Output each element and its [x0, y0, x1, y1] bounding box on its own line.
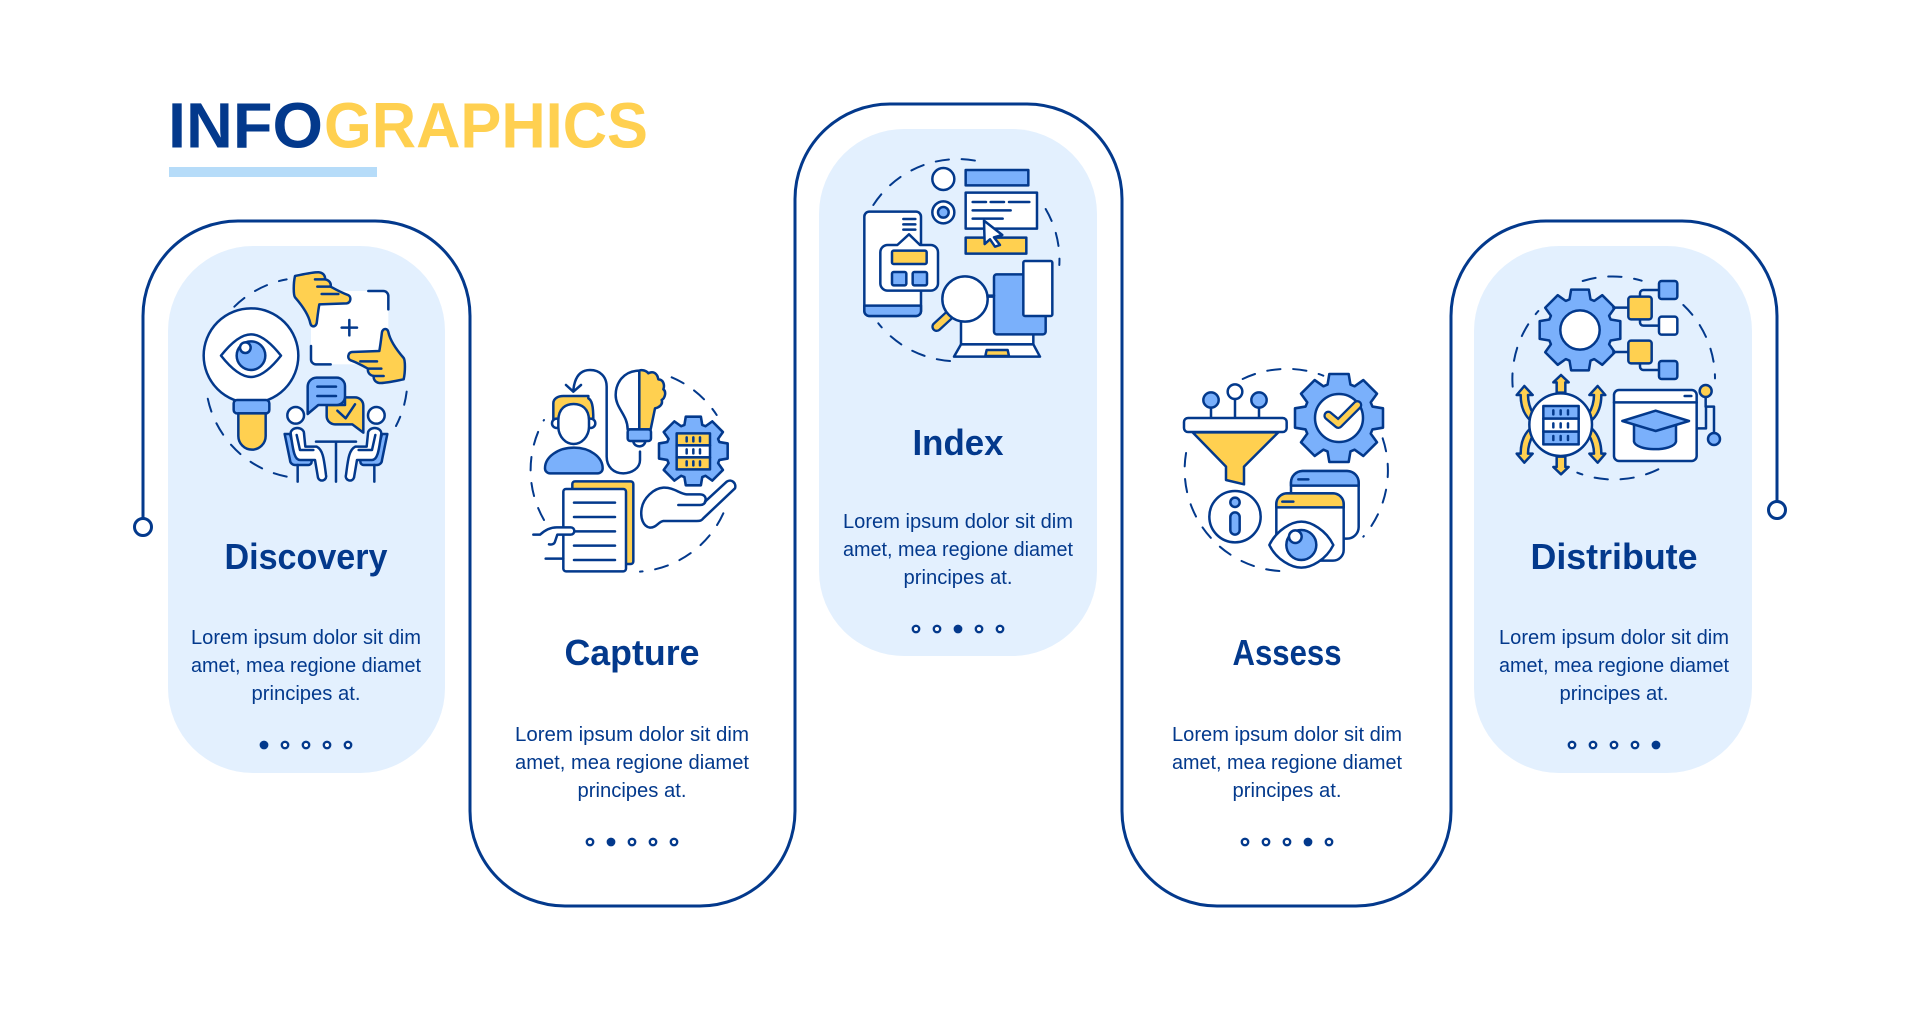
- pagination dots: Discovery: [261, 742, 351, 748]
- icon: index: [864, 159, 1059, 361]
- body text: Discovery: principes at.: [252, 683, 360, 705]
- body text: Index: [843, 511, 1073, 589]
- card: Index: [843, 159, 1073, 632]
- body text: Discovery: [191, 627, 421, 705]
- card: Discovery: [191, 272, 421, 748]
- body text: Discovery: Lorem ipsum dolor sit dim: [191, 627, 421, 649]
- body text: Assess: amet, mea regione diamet: [1172, 752, 1402, 774]
- icon: discovery: [204, 272, 407, 482]
- body text: Capture: amet, mea regione diamet: [515, 752, 749, 774]
- body text: Assess: principes at.: [1232, 780, 1342, 802]
- icon: assess: [1184, 369, 1388, 571]
- heading: Capture: Capture: [564, 632, 700, 673]
- body text: Assess: Lorem ipsum dolor sit dim: [1172, 724, 1402, 746]
- body text: Capture: [515, 724, 749, 802]
- body text: Capture: principes at.: [578, 780, 686, 802]
- heading: Index: Index: [912, 422, 1004, 463]
- title: INFO: [168, 90, 323, 162]
- icon: capture: [531, 370, 735, 572]
- heading: Assess: Assess: [1232, 632, 1342, 673]
- heading: Discovery: Discovery: [224, 536, 388, 577]
- body text: Index: principes at.: [904, 567, 1012, 589]
- pagination dots: Assess: [1242, 839, 1332, 845]
- body text: Distribute: amet, mea regione diamet: [1499, 655, 1729, 677]
- title: [168, 90, 648, 162]
- card: Assess: [1172, 369, 1402, 845]
- icon: distribute: [1512, 276, 1720, 480]
- body text: Capture: Lorem ipsum dolor sit dim: [515, 724, 749, 746]
- card: Distribute: [1499, 276, 1729, 748]
- body text: Distribute: Lorem ipsum dolor sit dim: [1499, 627, 1729, 649]
- panel: Distribute background: [1474, 246, 1752, 773]
- heading: Distribute: Distribute: [1530, 536, 1698, 577]
- panel: Discovery background: [168, 246, 445, 773]
- body text: Index: amet, mea regione diamet: [843, 539, 1073, 561]
- title underline: [169, 167, 377, 177]
- pagination dots: Distribute: [1569, 742, 1659, 748]
- pagination dots: Index: [913, 626, 1003, 632]
- pagination dots: Capture: [587, 839, 677, 845]
- body text: Distribute: [1499, 627, 1729, 705]
- connecting outline: [134, 104, 1786, 906]
- body text: Assess: [1172, 724, 1402, 802]
- title: GRAPHICS: [324, 90, 648, 162]
- body text: Distribute: principes at.: [1560, 683, 1668, 705]
- card: Capture: [515, 370, 749, 845]
- body text: Index: Lorem ipsum dolor sit dim: [843, 511, 1073, 533]
- panel: Index background: [819, 129, 1097, 656]
- body text: Discovery: amet, mea regione diamet: [191, 655, 421, 677]
